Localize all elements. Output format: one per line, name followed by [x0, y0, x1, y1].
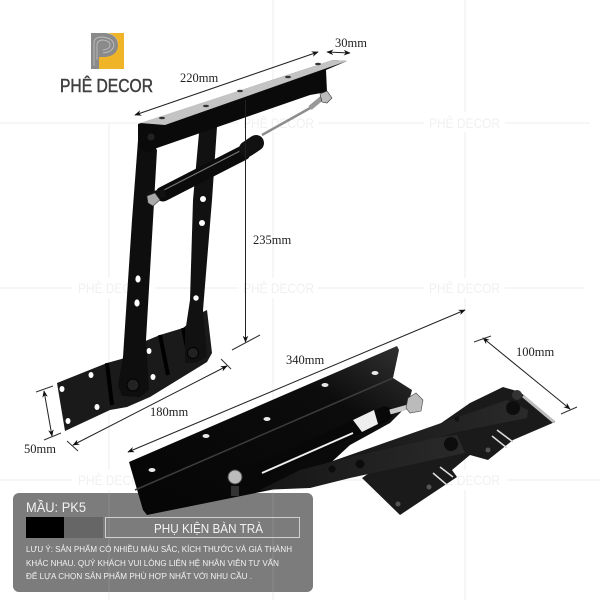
lower bracket: long arm — [330, 400, 528, 462]
upper bracket: left leg — [118, 127, 157, 397]
upper gas spring — [147, 91, 332, 206]
background watermark grid: PHÊ DECOR — [429, 280, 500, 296]
dimension: 220mm — [135, 52, 318, 115]
background watermark grid: PHÊ DECOR — [78, 472, 149, 488]
dimension: 235mm: 235mm — [253, 233, 291, 247]
dimension: 100mm — [474, 336, 577, 414]
upper bracket: base plate — [57, 310, 212, 431]
lower bracket: short arm — [260, 435, 465, 490]
upper bracket: top plate — [138, 60, 347, 153]
info panel — [13, 493, 313, 592]
dimension: 340mm — [128, 310, 465, 452]
background watermark grid: PHÊ DECOR — [429, 115, 500, 131]
logo: Phê Decor — [60, 33, 153, 96]
note text: KHÁC NHAU. QUÝ KHÁCH VUI LÒNG LIÊN HỆ NHÂN VIÊN TƯ VẤN — [26, 558, 279, 568]
dimension: 235mm — [232, 100, 291, 350]
dimension: 50mm: 50mm — [24, 442, 56, 456]
background watermark grid: PHÊ DECOR — [78, 280, 149, 296]
lower bracket: rear plate — [362, 387, 555, 515]
dimension: 30mm: 30mm — [335, 36, 367, 50]
dimension: 50mm — [24, 386, 61, 456]
dimension: 180mm — [67, 359, 231, 451]
panel heading: model: MẦU: PK5 — [26, 500, 86, 515]
upper bracket: right leg — [185, 127, 217, 363]
note text: LƯU Ý: SẢN PHẨM CÓ NHIỀU MÀU SẮC, KÍCH THƯỚC VÀ GIÁ THÀNH — [26, 543, 292, 554]
dimension: 30mm — [327, 36, 367, 53]
dimension: 220mm: 220mm — [180, 71, 218, 85]
dimension: 100mm: 100mm — [516, 345, 554, 359]
dimension: 340mm: 340mm — [286, 353, 324, 367]
background watermark grid: PHÊ DECOR — [429, 472, 500, 488]
colour swatches — [26, 517, 103, 538]
background watermark grid: PHÊ DECOR — [243, 115, 314, 131]
dimension: 180mm: 180mm — [150, 405, 188, 419]
background watermark grid: PHÊ DECOR — [243, 280, 314, 296]
product name box: PHỤ KIỆN BÀN TRÀ — [154, 521, 264, 536]
product name box — [106, 518, 300, 538]
lower gas spring — [228, 393, 423, 496]
lower bracket: angle rail — [129, 346, 412, 515]
logo: Phê Decor: PHÊ DECOR — [60, 75, 153, 96]
note text — [26, 543, 292, 581]
note text: ĐỂ LỰA CHỌN SẢN PHẨM PHÙ HỢP NHẤT VỚI NHU CẦU . — [26, 570, 252, 581]
